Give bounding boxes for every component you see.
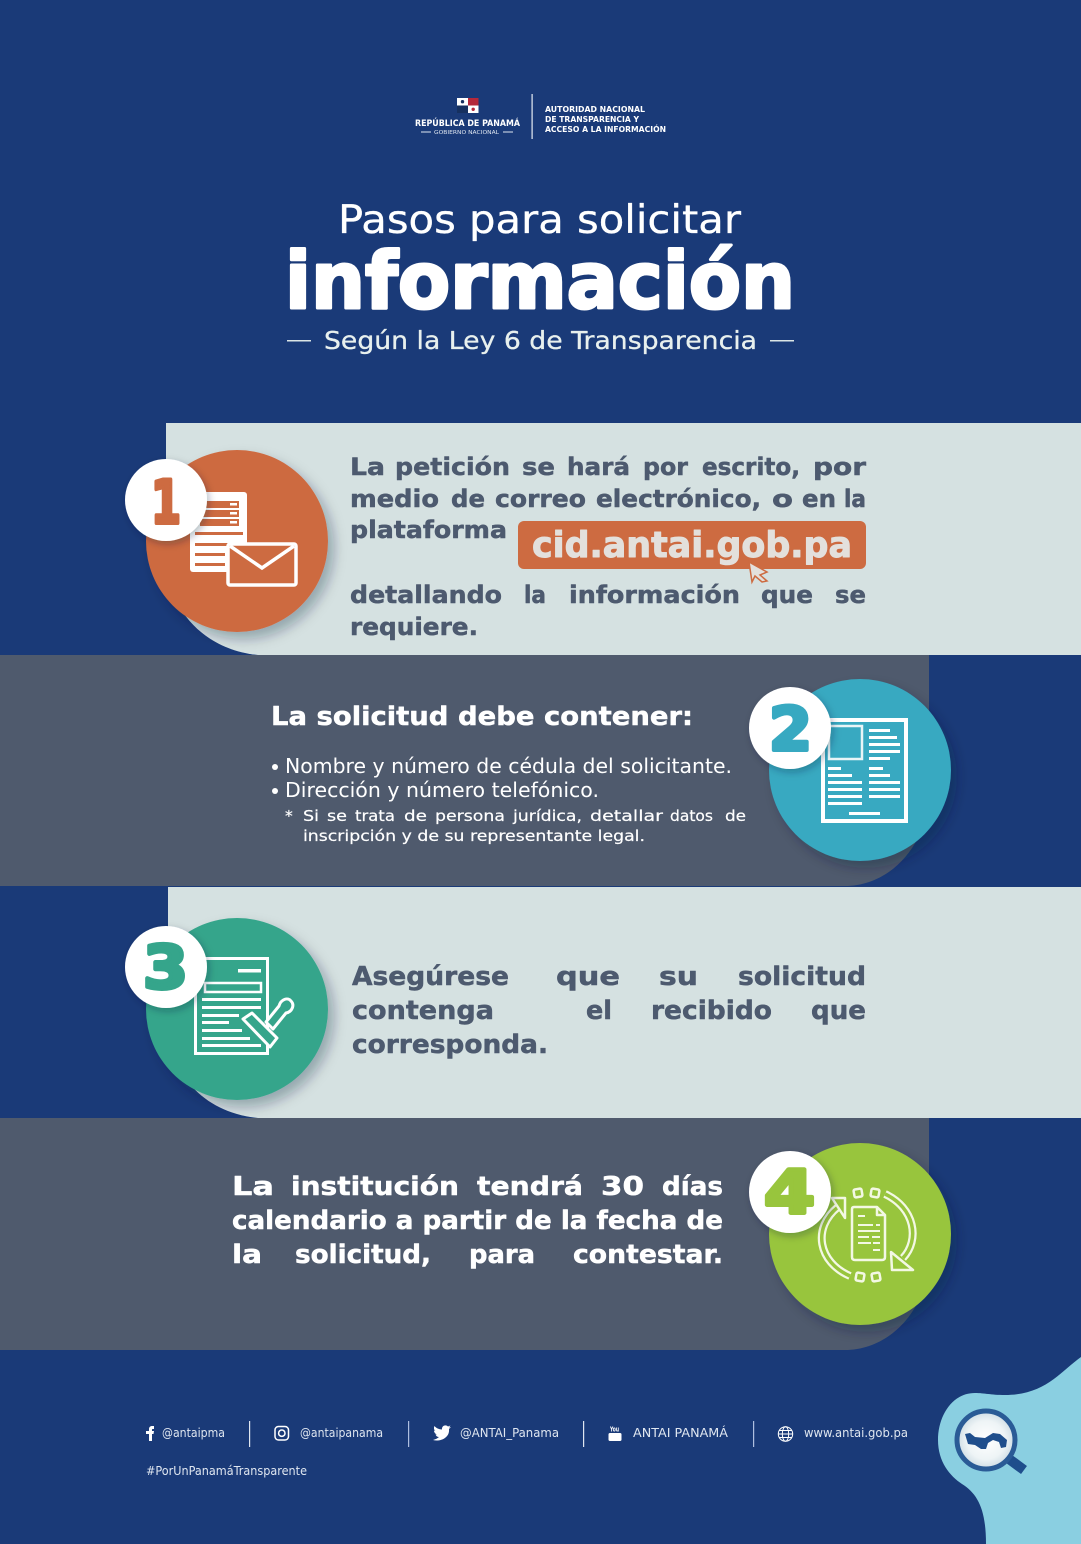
text block: step 1: la — [524, 581, 546, 609]
text block: step 4: 30 — [601, 1172, 644, 1202]
badge: number 4: 4 — [764, 1158, 815, 1228]
text: Autoridad Nacional de Transparencia: DE TRANSPARENCIA Y — [545, 115, 639, 124]
hashtag: #PorUnPanamáTransparente — [146, 1464, 307, 1478]
text block: step 1: de — [451, 485, 485, 513]
text block: step 1: que — [761, 581, 813, 609]
badge: number 3 — [125, 926, 207, 1008]
icon: Panama flag — [457, 98, 478, 113]
text: República de Panamá: REPÚBLICA DE PANAMÁ — [415, 117, 520, 129]
text: Autoridad Nacional de Transparencia: ACCESO A LA INFORMACIÓN — [545, 123, 666, 134]
list: requirements: Si — [303, 807, 319, 825]
icon: lime circle with document cycle — [769, 1143, 951, 1325]
panel: step 4 — [0, 1118, 951, 1350]
list: requirements: de — [725, 807, 746, 825]
text block: step 1: La — [350, 453, 385, 481]
text block: step 3: su — [659, 962, 698, 992]
handle: facebook: @antaipma — [162, 1426, 225, 1440]
text block: step 1: escrito, — [702, 453, 800, 481]
icon: magnifier with Panama map — [957, 1411, 1024, 1470]
icon: orange circle with document and envelope — [146, 450, 328, 632]
icon: youtube — [608, 1426, 622, 1441]
list: requirements: de — [404, 807, 427, 825]
link button: cid.antai.gob.pa — [518, 521, 866, 582]
text block: step 1: se — [522, 453, 555, 481]
icon: teal circle with document — [769, 679, 951, 861]
link button: cid.antai.gob.pa: cid.antai.gob.pa — [532, 525, 852, 566]
text block: step 1: por — [643, 453, 688, 481]
text block: step 1: se — [835, 581, 866, 609]
icon: youtube: You — [609, 1426, 619, 1434]
text block: step 4: institución — [291, 1172, 459, 1202]
panel: step 2 — [0, 655, 951, 886]
list: requirements: detallar — [590, 807, 664, 825]
text block: step 1: hará — [567, 453, 630, 481]
text block: step 3: que — [811, 996, 866, 1026]
logo header — [415, 94, 666, 139]
corner shape: light blue blob — [938, 1357, 1081, 1544]
text block: step 1: electrónico, — [596, 485, 761, 513]
badge: number 2: 2 — [769, 695, 812, 765]
text: Autoridad Nacional de Transparencia: AUTORIDAD NACIONAL — [545, 105, 645, 114]
list: requirements: inscripción y de su representante legal. — [303, 827, 645, 845]
text block: step 3 — [352, 962, 866, 1060]
list: requirements: persona — [435, 807, 505, 825]
heading line: información: información — [285, 237, 795, 327]
list: requirements: * — [285, 807, 293, 825]
icon: globe — [778, 1427, 793, 1441]
text block: step 3: el — [586, 996, 612, 1026]
text: Gobierno Nacional — [421, 130, 513, 136]
text block: step 1: información — [569, 581, 740, 609]
badge: number 1 — [125, 459, 207, 541]
icon: green circle with document and stamp — [146, 918, 328, 1100]
list: requirements — [272, 754, 746, 845]
text block: step 4: solicitud, — [295, 1240, 431, 1270]
text block: step 1: la — [844, 485, 866, 513]
icon: twitter — [433, 1425, 451, 1441]
panel: step 1 — [125, 423, 1081, 655]
text block: step 1: por — [813, 453, 866, 481]
text block: step 3: corresponda. — [352, 1030, 548, 1060]
text block: step 1: plataforma — [350, 516, 507, 544]
icon: cursor — [749, 562, 767, 582]
list: requirements: jurídica, — [512, 807, 582, 825]
heading: La solicitud debe contener: La solicitud debe contener: — [271, 702, 693, 732]
text block: step 1: en — [802, 485, 836, 513]
text block: step 4: la — [232, 1240, 262, 1270]
text block: step 1: requiere. — [350, 613, 478, 641]
text: Autoridad Nacional de Transparencia — [545, 105, 666, 134]
text: Gobierno Nacional: GOBIERNO NACIONAL — [434, 130, 499, 136]
text block: step 1: medio — [350, 485, 439, 513]
text block: step 4: tendrá — [477, 1172, 583, 1202]
text block: step 1: o — [772, 485, 793, 513]
list: requirements: trata — [355, 807, 395, 825]
badge: number 2 — [749, 687, 831, 769]
text block: step 1 — [350, 453, 866, 641]
text block: step 1: petición — [395, 453, 510, 481]
icon: instagram — [275, 1426, 288, 1440]
list: requirements: se — [327, 807, 347, 825]
icon: facebook — [146, 1426, 154, 1441]
website: www.antai.gob.pa — [804, 1426, 908, 1440]
text block: step 4: La — [232, 1172, 274, 1202]
footer: social links — [146, 1421, 908, 1478]
title — [285, 198, 795, 355]
text block: step 1: detallando — [350, 581, 502, 609]
subtitle: Según la Ley 6 de Transparencia — [324, 326, 757, 355]
list: requirements: Nombre y número de cédula del solicitante. — [285, 754, 732, 778]
text block: step 3: Asegúrese — [352, 962, 509, 992]
text block: step 3: recibido — [651, 996, 772, 1026]
handle: youtube: ANTAI PANAMÁ — [633, 1425, 729, 1440]
handle: instagram: @antaipanama — [300, 1426, 383, 1440]
badge: number 4 — [749, 1151, 831, 1233]
panel: step 3 — [125, 887, 1081, 1118]
text block: step 4: para — [469, 1240, 535, 1270]
text block: step 3: contenga — [352, 996, 494, 1026]
text block: step 4: calendario a partir de la fecha de — [232, 1206, 723, 1236]
heading line: Pasos para solicitar: Pasos para solicitar — [338, 198, 742, 243]
text block: step 1: correo — [495, 485, 586, 513]
text block: step 3: que — [556, 962, 620, 992]
handle: twitter: @ANTAI_Panama — [460, 1426, 559, 1440]
list: requirements: datos — [670, 807, 713, 825]
badge: number 3: 3 — [143, 933, 188, 1003]
list: requirements: Dirección y número telefónico. — [285, 778, 599, 802]
text block: step 4: contestar. — [573, 1240, 723, 1270]
text block: step 3: solicitud — [738, 962, 866, 992]
text block: step 4: días — [662, 1172, 723, 1202]
badge: number 1: 1 — [151, 468, 181, 538]
text block: step 4 — [232, 1172, 723, 1270]
